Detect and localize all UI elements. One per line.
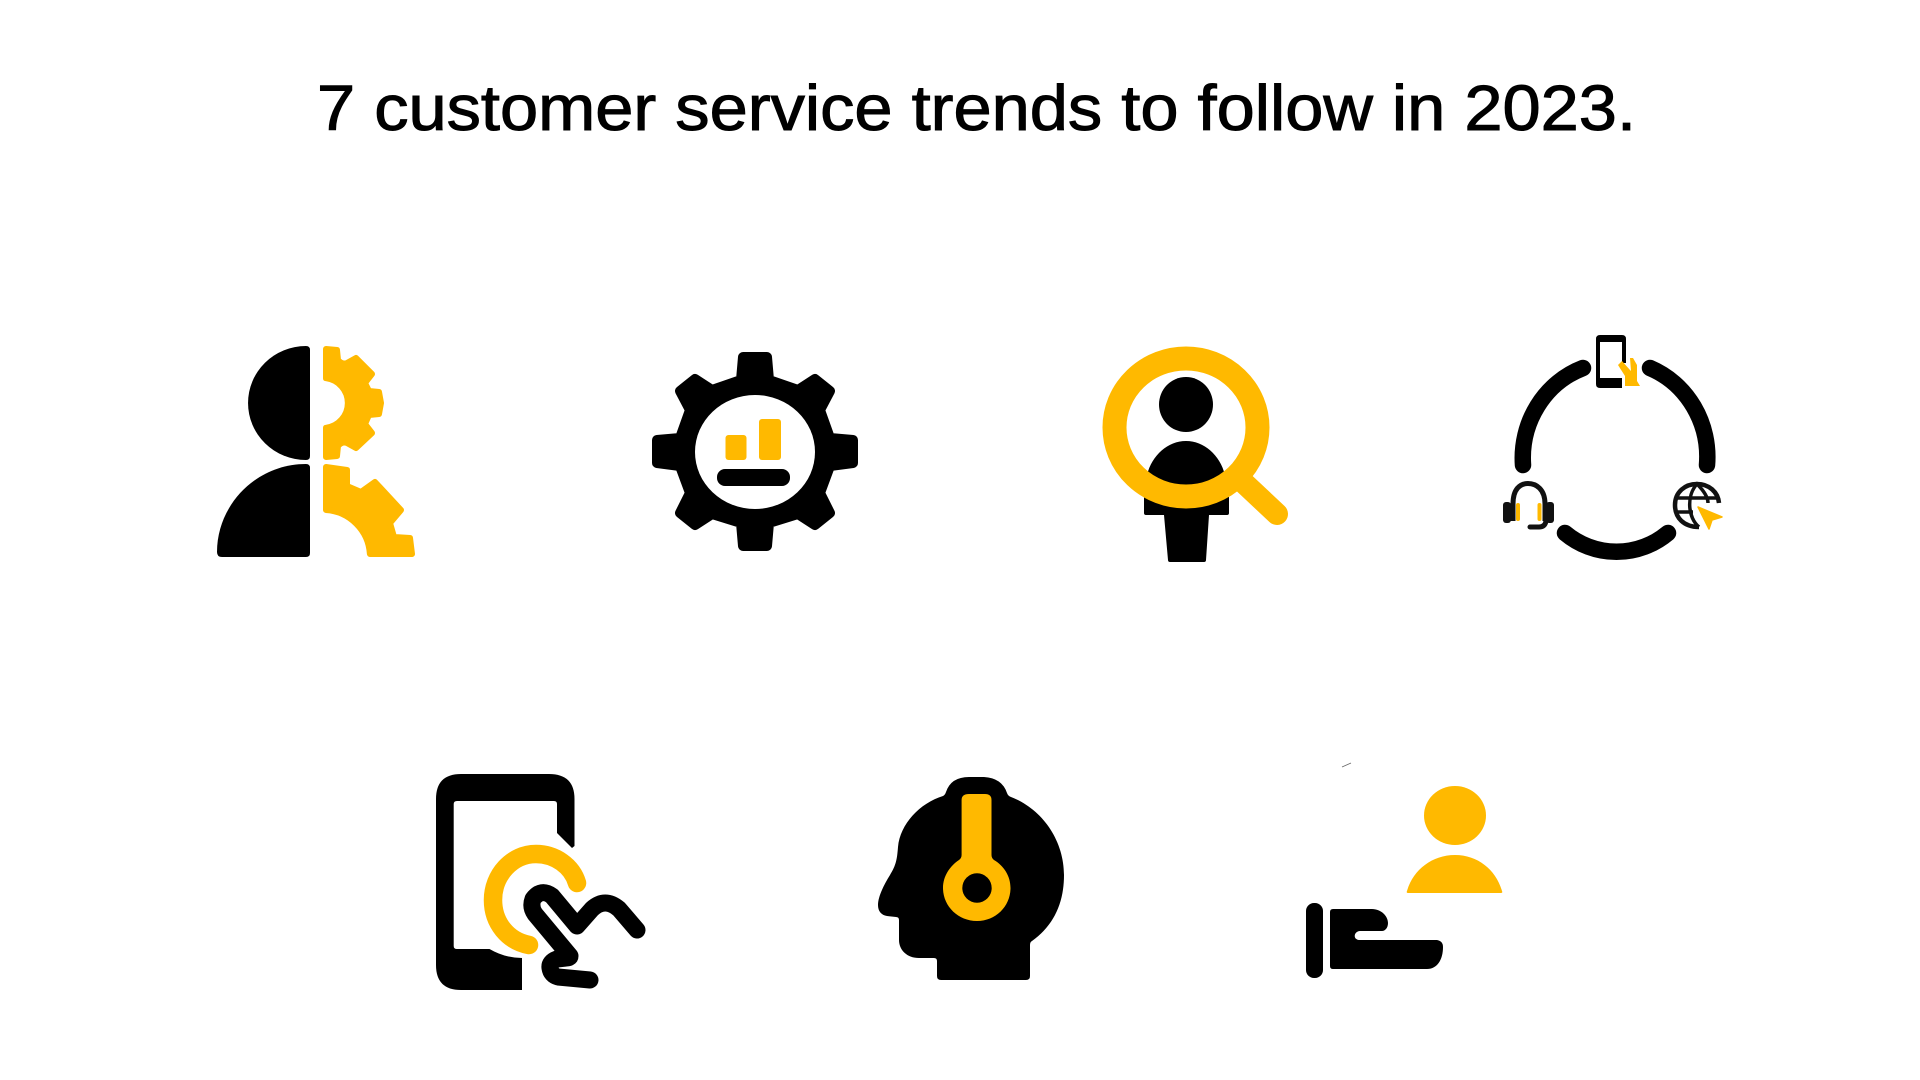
icon: hand offering person [1306, 763, 1502, 978]
icon: magnifying glass over person [1114, 358, 1277, 562]
small phone with hand [1596, 335, 1640, 388]
phone body [436, 774, 574, 990]
icon: omnichannel cycle [1503, 335, 1722, 552]
icon: phone with touch gesture [436, 774, 637, 990]
icon: person and gear [217, 346, 412, 557]
cycle arcs [1523, 368, 1707, 552]
title: 7 customer service trends to follow in 2023. [317, 72, 1636, 144]
icon: head with headphones [878, 777, 1064, 980]
hand [532, 893, 637, 980]
globe with cursor [1675, 484, 1722, 529]
icon: gear with chart [657, 357, 853, 546]
headset [1503, 484, 1554, 527]
touch ripple [493, 854, 577, 945]
